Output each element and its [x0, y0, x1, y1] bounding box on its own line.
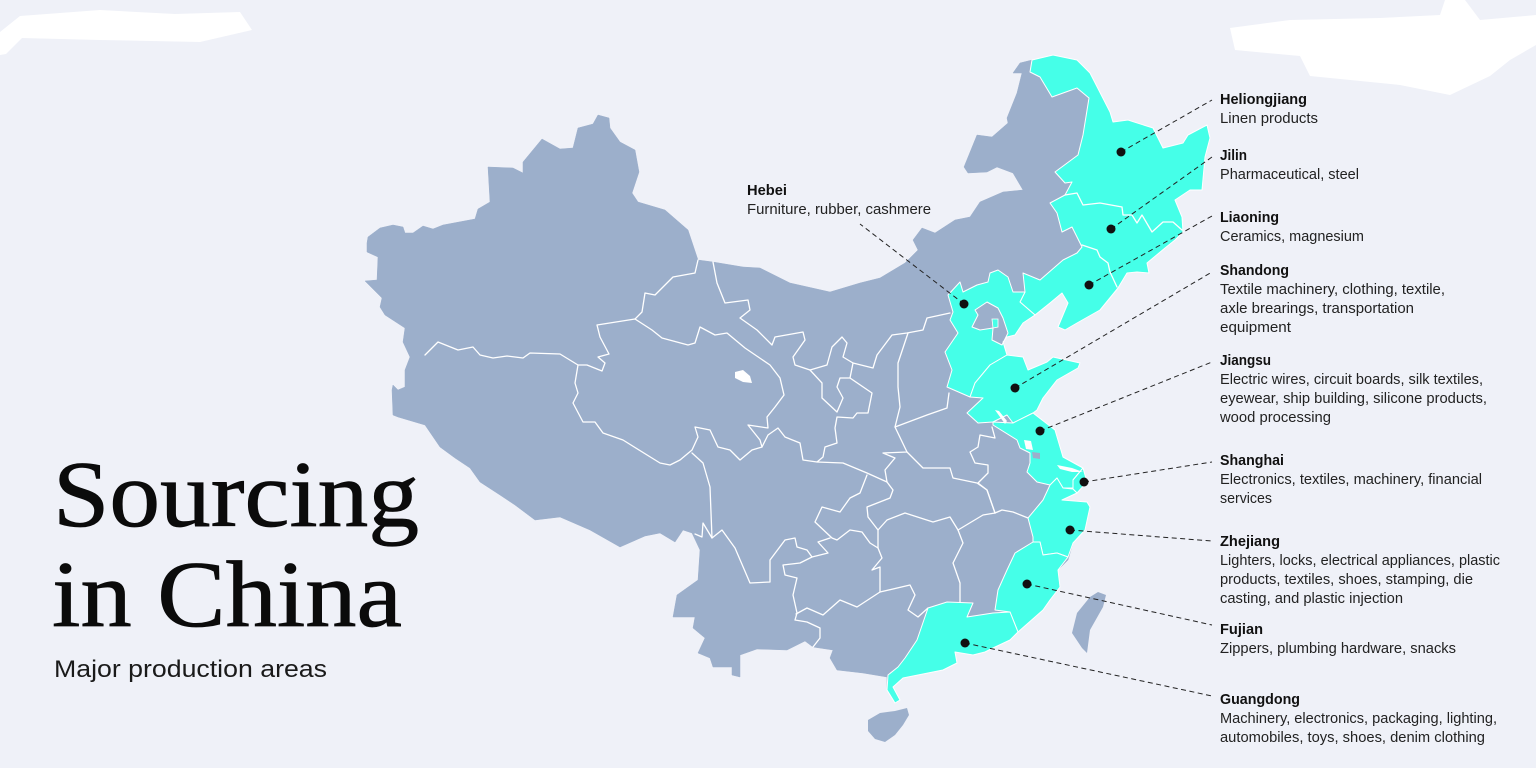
map of China [365, 55, 1210, 742]
highlighted region: Fujian [995, 542, 1068, 632]
label: Hebei: Hebei [747, 182, 787, 199]
Tianjin inset [992, 319, 998, 328]
subtitle: Major production areas [54, 656, 327, 683]
Taiwan [1072, 592, 1106, 653]
label: Guangdong [1220, 691, 1497, 746]
label: Shanghai: services [1220, 490, 1272, 507]
label: Jilin: Pharmaceutical, steel [1220, 166, 1359, 183]
Qinghai lake [735, 370, 752, 383]
label: Jiangsu [1219, 352, 1487, 426]
label: Jilin: Jilin [1220, 147, 1247, 164]
label: Guangdong: Guangdong [1220, 691, 1300, 708]
label: Zhejiang: Zhejiang [1220, 533, 1280, 550]
highlighted region: Jiangsu [993, 413, 1083, 488]
white blob top left [0, 10, 252, 55]
label: Fujian: Zippers, plumbing hardware, snacks [1220, 640, 1456, 657]
label: Jiangsu: Jiangsu [1220, 352, 1271, 369]
label: Zhejiang: Lighters, locks, electrical appliances, plastic [1220, 552, 1500, 569]
label: Hebei: Furniture, rubber, cashmere [747, 201, 931, 218]
highlighted region: Zhejiang [1028, 478, 1090, 557]
label: Hebei [747, 182, 931, 218]
label: Shandong [1220, 262, 1445, 336]
label: Liaoning [1220, 209, 1364, 245]
label: Guangdong: Machinery, electronics, packaging, lighting, [1220, 710, 1497, 727]
label: Zhejiang: casting, and plastic injection [1220, 590, 1403, 607]
white blob top right [1230, 0, 1536, 95]
label: Zhejiang: products, textiles, shoes, stamping, die [1220, 571, 1473, 588]
label: Jilin [1220, 147, 1359, 183]
label: Fujian: Fujian [1220, 621, 1263, 638]
label: Shanghai: Electronics, textiles, machinery, financial [1220, 471, 1482, 488]
leader lines [860, 100, 1212, 696]
label: Shanghai: Shanghai [1220, 452, 1284, 469]
location dots [960, 148, 1126, 648]
label: Heilongjiang: Heliongjiang [1220, 91, 1307, 108]
mainland base [365, 55, 1210, 703]
highlighted region: Shanghai [1073, 468, 1087, 493]
lakes and rivers on the east coast [995, 410, 1083, 472]
label: Heilongjiang: Linen products [1220, 110, 1318, 127]
label: Jiangsu: wood processing [1219, 409, 1331, 426]
label: Shandong: Shandong [1220, 262, 1289, 279]
label: Guangdong: automobiles, toys, shoes, denim clothing [1220, 729, 1485, 746]
Anhui notch [1032, 452, 1040, 459]
highlighted region: Shandong [967, 355, 1080, 423]
label: Fujian [1220, 621, 1456, 657]
province borders [425, 260, 1028, 647]
highlighted region: Hebei [945, 270, 1035, 397]
label: Shanghai [1220, 452, 1482, 507]
label: Shandong: Textile machinery, clothing, textile, [1220, 281, 1445, 298]
highlighted region: Guangdong [887, 602, 1018, 703]
highlighted region: Heilongjiang, Jilin, Liaoning [1020, 55, 1210, 330]
label: Jiangsu: eyewear, ship building, silicone products, [1220, 390, 1487, 407]
title: in China [52, 543, 402, 647]
label: Shandong: axle brearings, transportation [1220, 300, 1414, 317]
label: Jiangsu: Electric wires, circuit boards, silk textiles, [1220, 371, 1483, 388]
label: Shandong: equipment [1220, 319, 1292, 336]
label: Heilongjiang [1220, 91, 1318, 127]
title [52, 443, 419, 647]
label: Liaoning: Liaoning [1220, 209, 1279, 226]
label: Liaoning: Ceramics, magnesium [1220, 228, 1364, 245]
title: Sourcing [53, 443, 419, 547]
Hainan [868, 708, 909, 742]
label: Zhejiang [1220, 533, 1500, 607]
